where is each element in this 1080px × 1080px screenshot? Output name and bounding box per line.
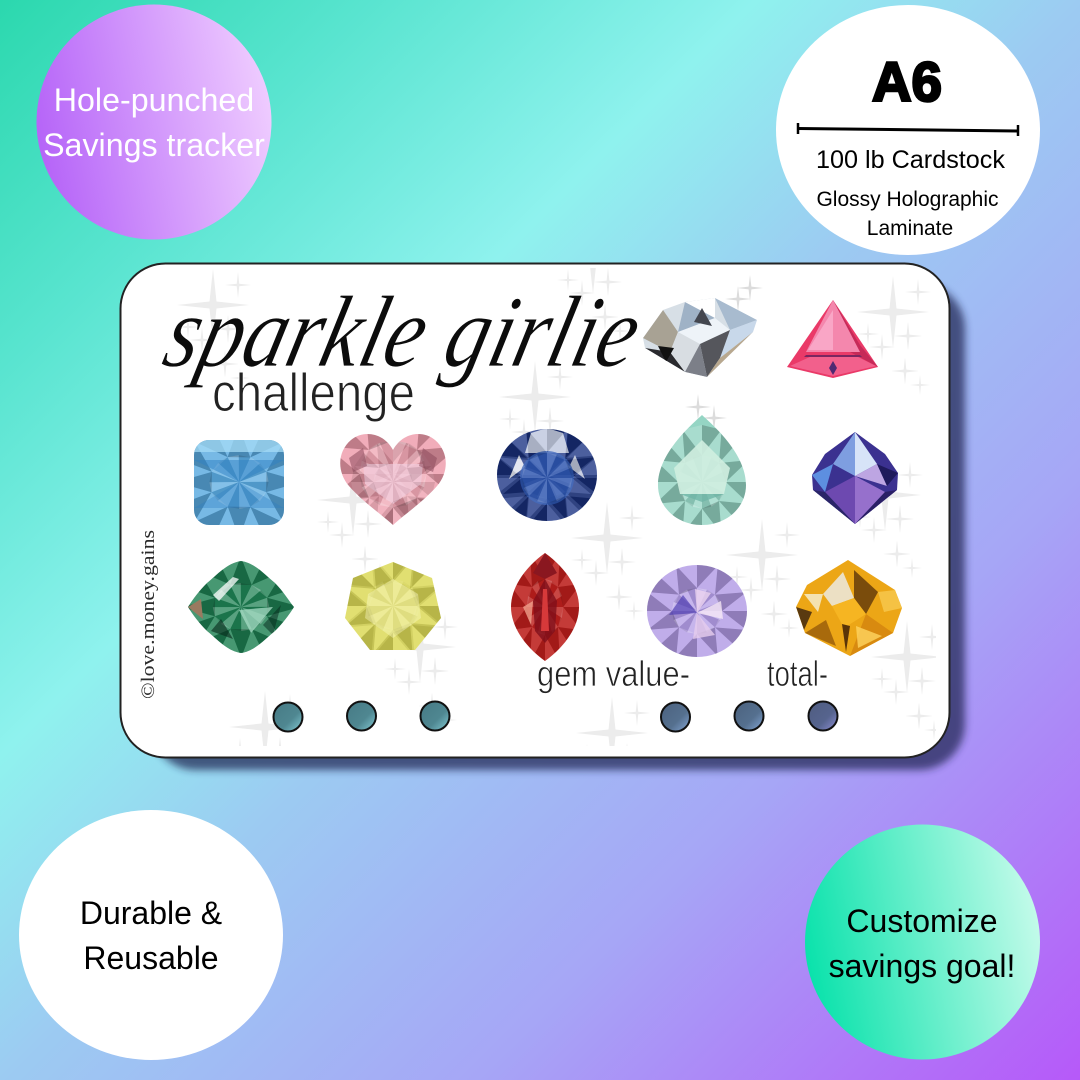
gem: mint pear — [658, 415, 746, 525]
gem: navy round — [497, 429, 597, 521]
gem: red marquise — [511, 553, 579, 661]
savings tracker card — [120, 262, 950, 758]
card shadow — [150, 283, 965, 770]
gem: yellow heptagon — [345, 562, 441, 650]
badge: durable and reusable: Reusable — [83, 940, 219, 976]
badge: A6 size and material — [776, 5, 1040, 255]
badge: A6 size and material: Glossy Holographic — [816, 188, 999, 211]
title: sparkle girlie: sparkle girlie — [154, 276, 652, 389]
title: challenge: challenge — [212, 363, 415, 423]
gem: indigo kite — [810, 430, 900, 526]
gem: amber cushion — [793, 558, 903, 658]
badge: hole-punched savings tracker: Hole-punched — [54, 82, 254, 118]
label: gem value: gem value- — [537, 653, 690, 694]
badge: A6 size and material: 100 lb Cardstock — [816, 146, 1005, 174]
gem: pink trillion — [787, 300, 878, 378]
punch holes — [274, 702, 838, 732]
badge: hole-punched savings tracker — [36, 4, 272, 240]
badge: durable and reusable: Durable & — [80, 895, 222, 931]
gem: lilac round — [647, 565, 747, 657]
badge: hole-punched savings tracker: Savings tracker — [43, 127, 265, 163]
badge: customize savings goal: savings goal! — [829, 948, 1015, 984]
gem: green cushion — [188, 561, 294, 653]
badge: durable and reusable — [19, 810, 283, 1060]
gem: pink heart — [340, 434, 446, 525]
badge: A6 size and material: Laminate — [867, 217, 953, 240]
badge: customize savings goal: Customize — [846, 903, 998, 939]
gem: clear diamond — [643, 298, 757, 377]
gem: blue cushion — [194, 440, 284, 525]
copyright handle: ©love.money.gains — [138, 530, 159, 699]
dimension line — [798, 123, 1018, 136]
label: total: total- — [767, 653, 828, 694]
badge: customize savings goal — [805, 824, 1040, 1060]
size heading A6: A6 — [872, 50, 942, 113]
